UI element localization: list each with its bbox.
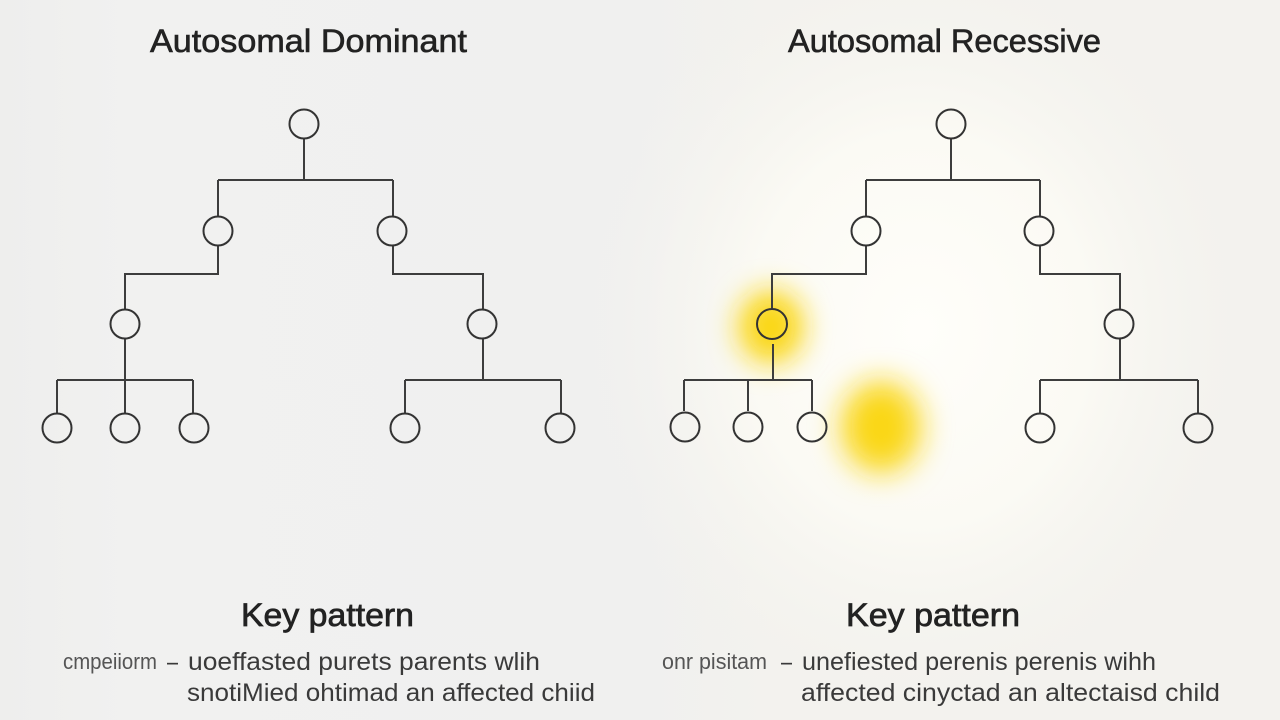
pedigree chart: dominant bbox=[42, 110, 574, 442]
text block: dominant description bbox=[63, 648, 595, 707]
text block: dominant description: snotiMied ohtimad an affected chiid bbox=[187, 679, 595, 707]
text block: recessive description bbox=[662, 648, 1220, 707]
text block: recessive description: – bbox=[781, 648, 792, 676]
text block: dominant description: – bbox=[167, 648, 178, 676]
text block: dominant description: uoeffasted purets parents wlih bbox=[188, 648, 540, 676]
highlight: yellow glow on node bbox=[738, 290, 804, 364]
text block: recessive description: affected cinyctad an altectaisd child bbox=[801, 679, 1220, 707]
heading: key pattern recessive: Key pattern bbox=[846, 597, 1020, 633]
pedigree chart: recessive bbox=[670, 110, 1212, 442]
panel: autosomal recessive bbox=[662, 23, 1220, 707]
text block: dominant description: cmpeiiorm bbox=[63, 649, 157, 674]
text block: recessive description: unefiested perenis perenis wihh bbox=[802, 648, 1156, 676]
panel: autosomal dominant bbox=[42, 23, 595, 707]
text block: recessive description: onr pisitam bbox=[662, 649, 767, 674]
highlight: yellow glow spot bbox=[841, 381, 921, 473]
heading: autosomal dominant: Autosomal Dominant bbox=[150, 23, 467, 59]
heading: autosomal recessive: Autosomal Recessive bbox=[788, 23, 1101, 59]
heading: key pattern dominant: Key pattern bbox=[241, 597, 414, 633]
